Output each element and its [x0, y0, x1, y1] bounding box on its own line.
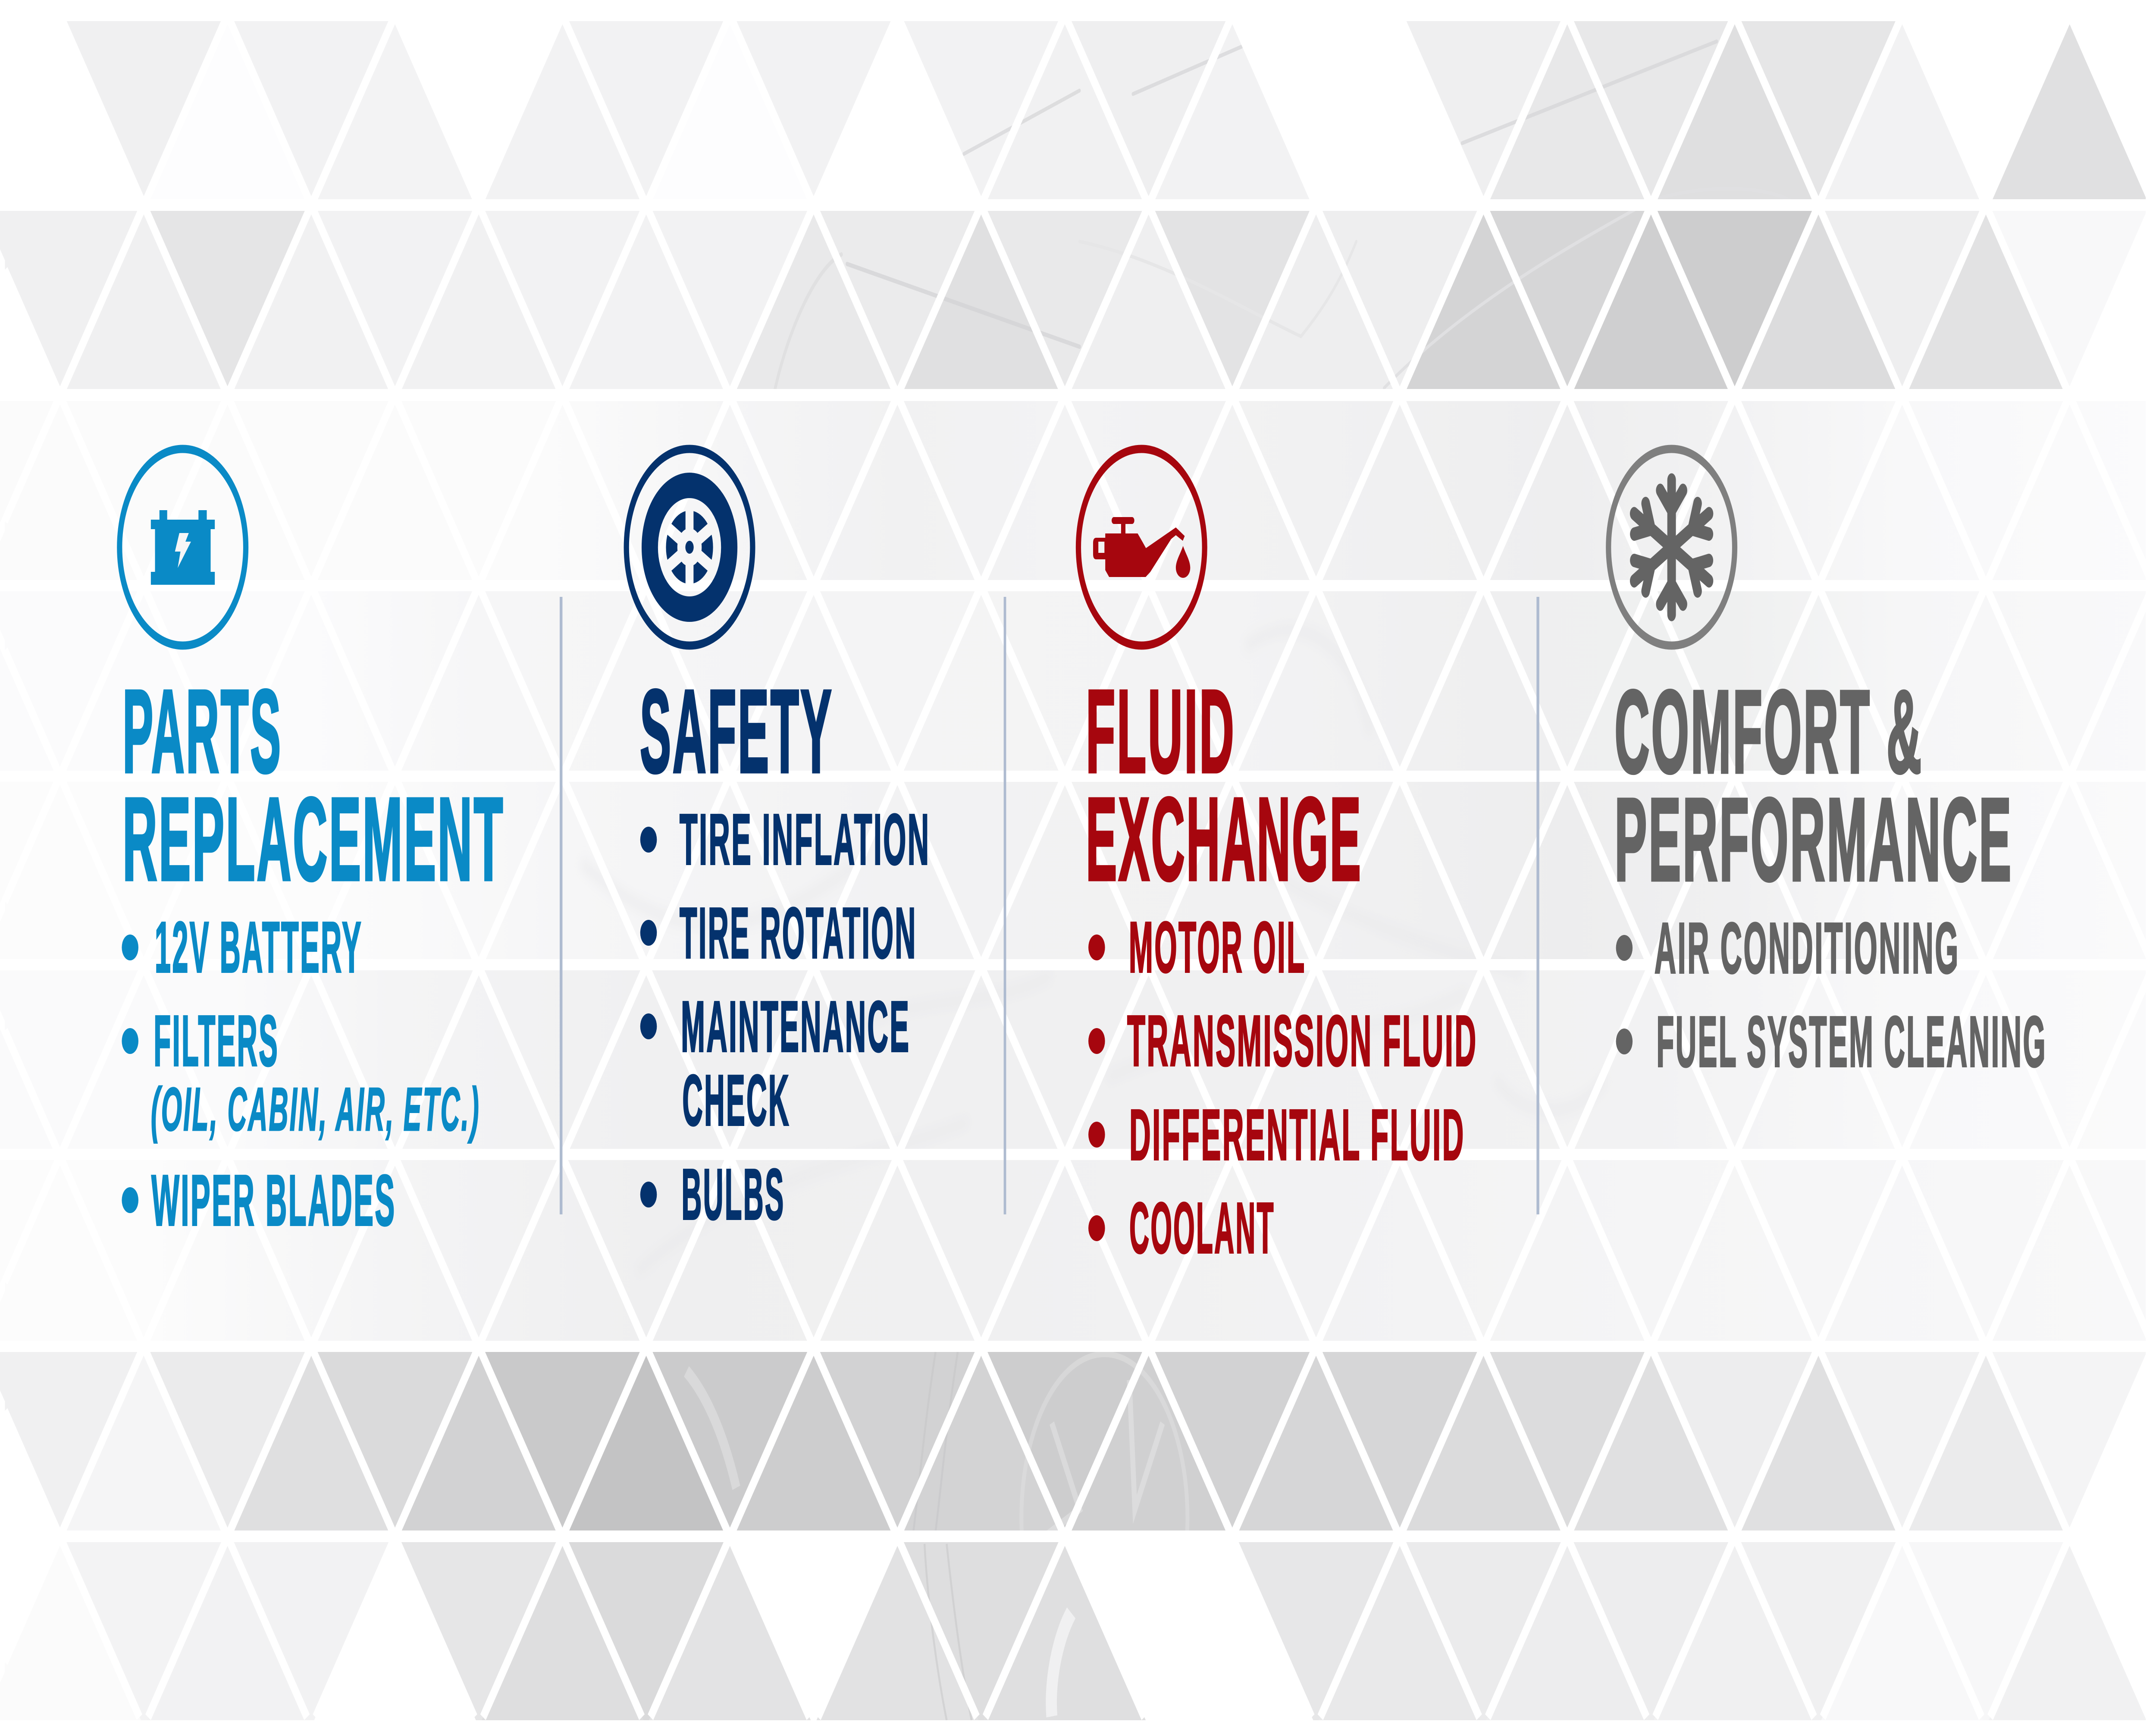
- heading: fluid exchange: [1086, 665, 1363, 905]
- list: comfort and performance items: [1616, 908, 2047, 1082]
- icon: snowflake in circle: [1608, 449, 1735, 646]
- heading: parts replacement: PARTS: [122, 665, 282, 797]
- list: fluid exchange items: [1088, 907, 1478, 1268]
- divider between parts and safety: [560, 597, 562, 1214]
- photo detail: hood creases and car body lines: [775, 41, 1799, 389]
- heading: safety: SAFETY: [640, 665, 833, 797]
- list: safety items: CHECK: [682, 1060, 790, 1141]
- heading: parts replacement: [122, 665, 505, 905]
- icon: tire in circle: [627, 449, 752, 646]
- photo detail: front wheel and tyre: [686, 1352, 1188, 1720]
- panel: safety: [627, 449, 931, 1235]
- list: fluid exchange items: TRANSMISSION FLUID: [1127, 1000, 1478, 1081]
- list: fluid exchange items: MOTOR OIL: [1129, 907, 1306, 988]
- heading: fluid exchange: EXCHANGE: [1086, 773, 1363, 905]
- list: safety items: BULBS: [681, 1154, 785, 1235]
- heading: comfort and performance: [1614, 665, 2013, 905]
- list: safety items: [640, 799, 931, 1235]
- list: fluid exchange items: DIFFERENTIAL FLUID: [1129, 1095, 1465, 1175]
- list: parts replacement items: 12V BATTERY: [155, 907, 363, 988]
- panel: comfort and performance: [1608, 449, 2047, 1082]
- list: fluid exchange items: COOLANT: [1129, 1188, 1275, 1268]
- list: safety items: MAINTENANCE: [681, 986, 910, 1067]
- divider between fluid exchange and comfort: [1536, 597, 1539, 1214]
- list: safety items: TIRE ROTATION: [680, 893, 917, 973]
- panel: parts replacement: [119, 449, 505, 1241]
- list: parts replacement items: FILTERS: [154, 1000, 279, 1081]
- heading: fluid exchange: FLUID: [1086, 665, 1236, 797]
- icon: oil can in circle: [1078, 449, 1205, 646]
- list: parts replacement items: WIPER BLADES: [151, 1160, 396, 1241]
- heading: parts replacement: REPLACEMENT: [122, 773, 505, 905]
- list: comfort and performance items: AIR CONDITIONING: [1655, 908, 1960, 988]
- heading: comfort and performance: COMFORT &: [1614, 665, 1923, 797]
- divider between safety and fluid exchange: [1004, 597, 1006, 1214]
- list: parts replacement items: [122, 907, 480, 1241]
- panel: fluid exchange: [1078, 449, 1478, 1268]
- list: parts replacement items: (OIL, CABIN, AIR, ETC.): [151, 1076, 480, 1144]
- list: safety items: TIRE INFLATION: [680, 799, 931, 880]
- icon: battery in circle: [119, 449, 246, 646]
- photo detail: faded engine bay: [581, 630, 1605, 1272]
